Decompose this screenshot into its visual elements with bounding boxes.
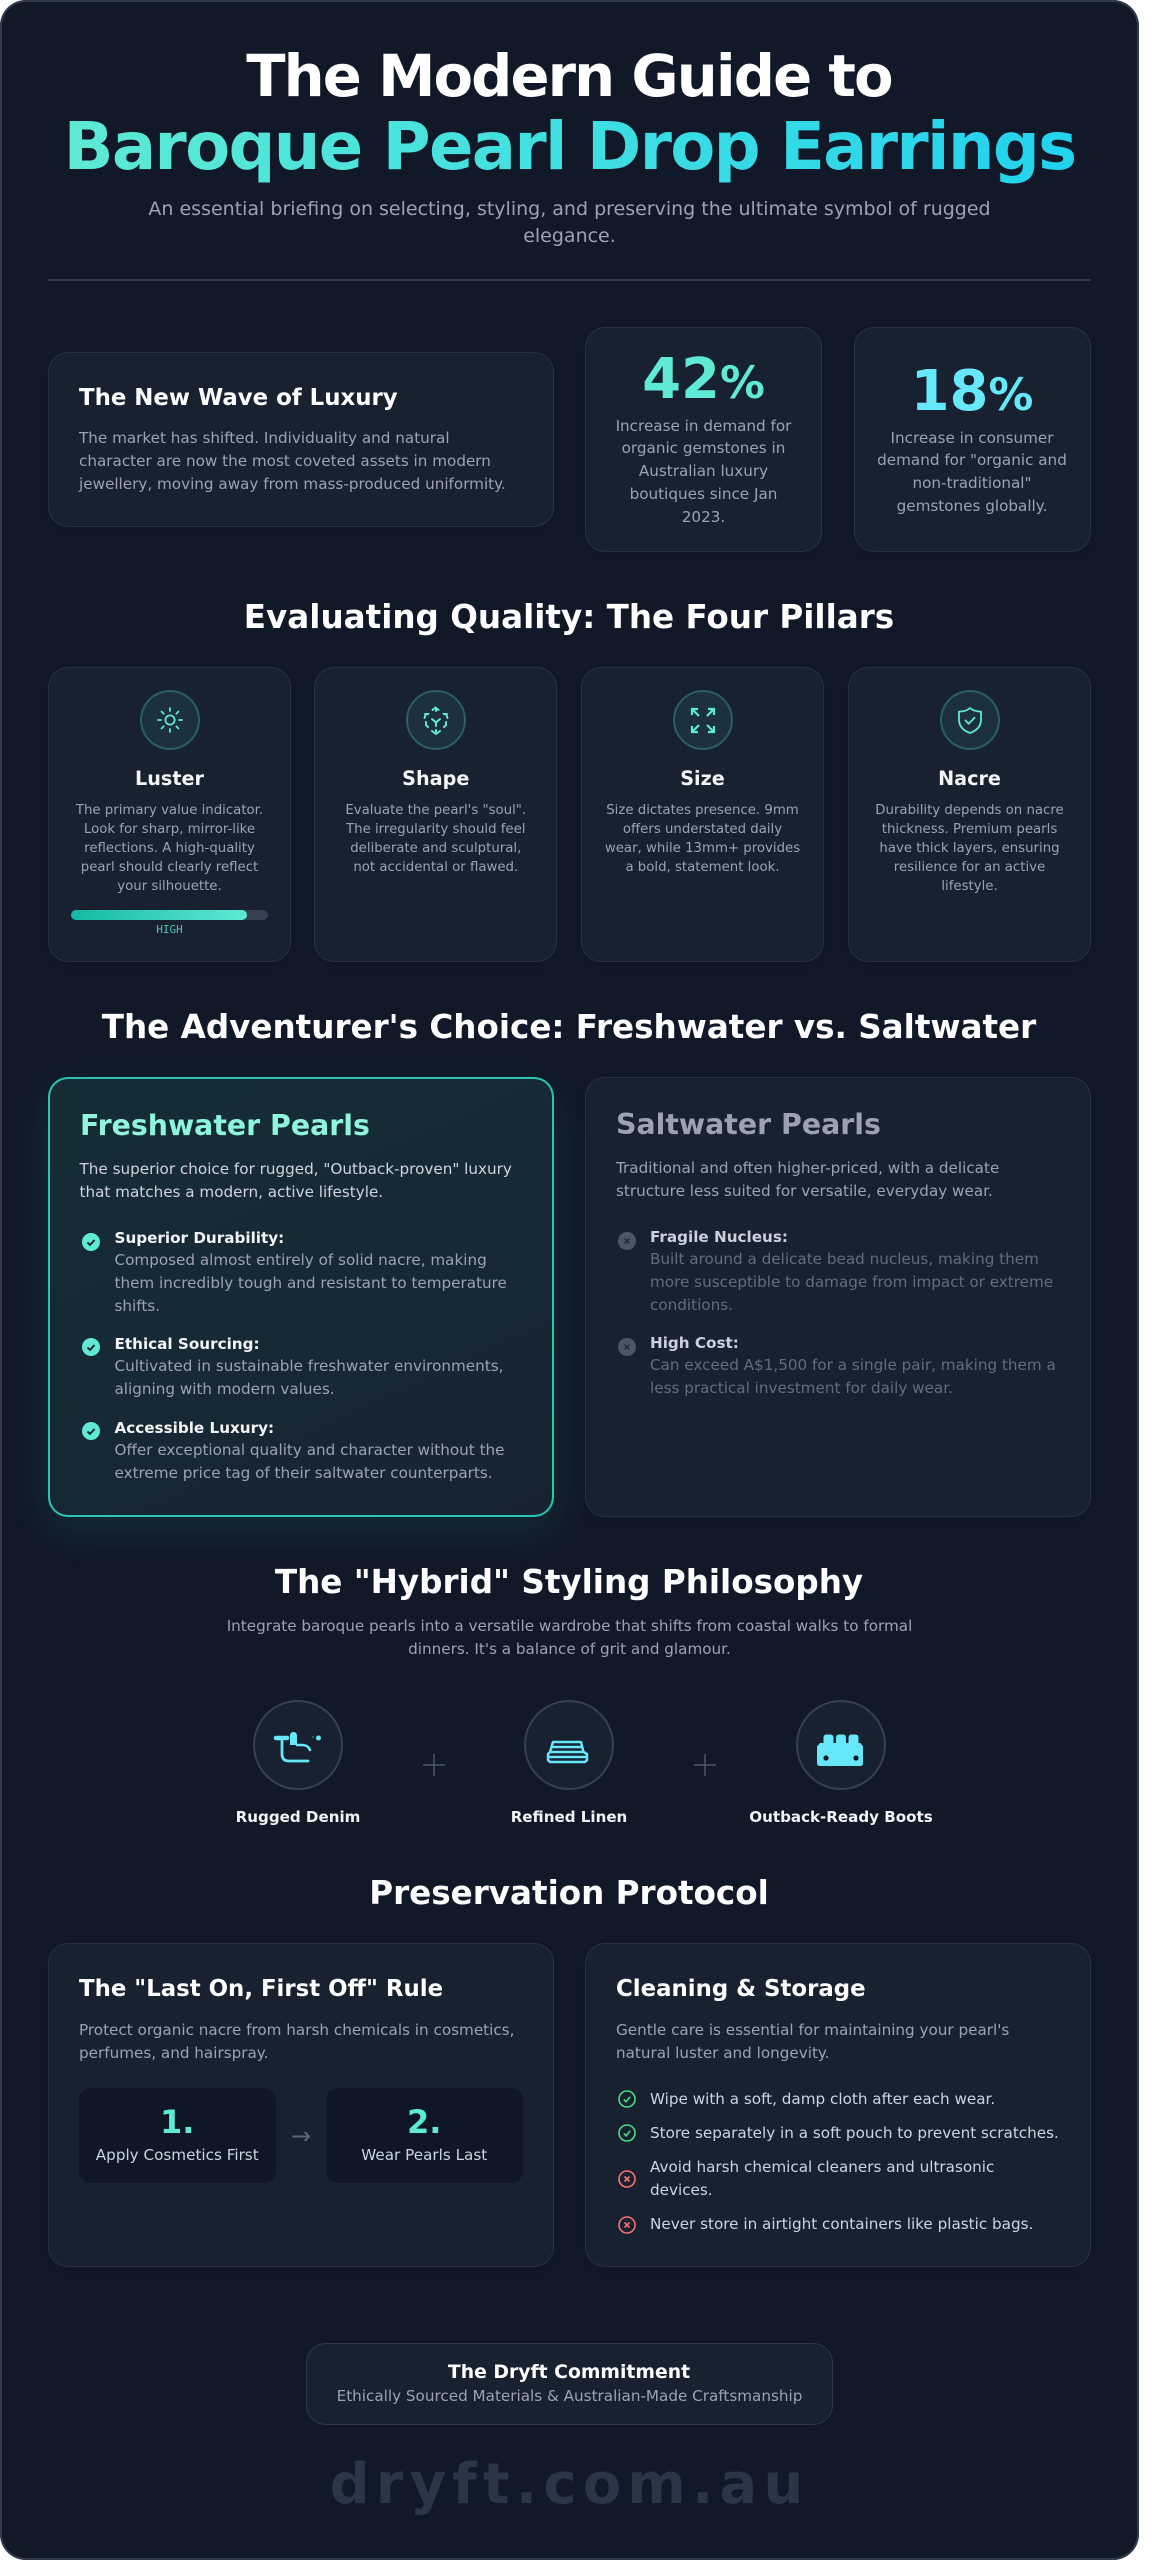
- text block: jewellery, moving away from mass-produced uniformity.: [79, 475, 506, 493]
- list item: [114, 1228, 507, 1315]
- panel heading: Cleaning & Storage: [616, 1976, 866, 2002]
- panel: nacre: [848, 667, 1091, 962]
- pillar text: not accidental or flawed.: [353, 860, 518, 875]
- list item: more susceptible to damage from impact or extreme: [650, 1273, 1053, 1291]
- step number: 1.: [160, 2103, 194, 2141]
- panel heading: Freshwater Pearls: [80, 1108, 370, 1142]
- subtitle: An essential briefing on selecting, styling, and preserving the ultimate symbol of rugged: [148, 198, 991, 220]
- icon: sun: [140, 690, 200, 750]
- panel: dryft commitment: [306, 2343, 832, 2425]
- commitment title: The Dryft Commitment: [448, 2362, 690, 2383]
- text block: [78, 429, 506, 493]
- panel: stat 42%: [585, 327, 822, 552]
- step label: Apply Cosmetics First: [96, 2146, 259, 2164]
- heading: The New Wave of Luxury: [79, 385, 398, 411]
- heading: four pillars: Evaluating Quality: The Four Pillars: [244, 598, 894, 636]
- icon: cross: [618, 1232, 636, 1250]
- label: outback-ready boots: Outback-Ready Boots: [749, 1808, 933, 1826]
- pillar title: Luster: [135, 767, 204, 790]
- icon: check: [82, 1422, 100, 1440]
- list item: Superior Durability:: [114, 1228, 284, 1246]
- heading: freshwater vs saltwater: The Adventurer's Choice: Freshwater vs. Saltwater: [102, 1008, 1036, 1046]
- care tip: Avoid harsh chemical cleaners and ultrasonic: [650, 2158, 994, 2176]
- pillar text: [76, 803, 263, 894]
- icon: shield check: [940, 690, 1000, 750]
- intro text: Traditional and often higher-priced, with a delicate: [616, 1159, 999, 1177]
- icon: check: [618, 2090, 636, 2108]
- stat description: non-traditional": [912, 474, 1032, 492]
- pillar text: deliberate and sculptural,: [350, 841, 521, 856]
- list item: Built around a delicate bead nucleus, making them: [650, 1250, 1039, 1268]
- pillar text: wear, while 13mm+ provides: [605, 841, 800, 856]
- brand wordmark: dryft.com.au: [330, 2452, 809, 2517]
- intro text: The superior choice for rugged, "Outback-proven" luxury: [80, 1160, 512, 1178]
- stat number: 18%: [911, 359, 1033, 424]
- subtitle: [148, 198, 991, 247]
- intro text: [616, 1159, 999, 1200]
- panel text: natural luster and longevity.: [616, 2044, 830, 2062]
- bar label: HIGH: [156, 923, 183, 936]
- list item: Can exceed A$1,500 for a single pair, making them a: [650, 1356, 1056, 1374]
- section intro: Integrate baroque pearls into a versatile wardrobe that shifts from coastal walks to formal: [227, 1617, 912, 1635]
- stat description: [877, 428, 1067, 515]
- panel heading: Saltwater Pearls: [616, 1108, 881, 1141]
- pillar text: Look for sharp, mirror-like: [84, 822, 255, 837]
- panel text: Gentle care is essential for maintaining your pearl's: [616, 2021, 1009, 2039]
- step 2: [326, 2088, 522, 2183]
- intro text: structure less suited for versatile, everyday wear.: [616, 1182, 993, 1200]
- list item: High Cost:: [650, 1334, 739, 1352]
- pillar text: a bold, statement look.: [625, 860, 780, 875]
- pillar text: [605, 803, 800, 875]
- commitment text: Ethically Sourced Materials & Australian-Made Craftsmanship: [337, 2387, 802, 2405]
- arrow: →: [291, 2122, 311, 2150]
- care tip: [650, 2158, 994, 2199]
- panel: shape: [314, 667, 557, 962]
- panel text: [616, 2021, 1009, 2062]
- pillar text: [875, 803, 1064, 894]
- stat description: 2023.: [682, 508, 725, 526]
- pillar text: The irregularity should feel: [346, 822, 525, 837]
- pillar title: Size: [680, 767, 725, 790]
- list item: Fragile Nucleus:: [650, 1228, 788, 1246]
- pillar text: The primary value indicator.: [76, 803, 263, 818]
- list item: aligning with modern values.: [114, 1380, 335, 1398]
- icon: check: [618, 2124, 636, 2142]
- list item: Offer exceptional quality and character without the: [114, 1441, 504, 1459]
- panel heading: The "Last On, First Off" Rule: [79, 1976, 443, 2002]
- intro text: [79, 1160, 512, 1201]
- list item: less practical investment for daily wear.: [650, 1379, 953, 1397]
- step label: Wear Pearls Last: [361, 2146, 487, 2164]
- icon: refined linen: [524, 1700, 614, 1790]
- pillar text: resilience for an active: [894, 860, 1045, 875]
- panel text: perfumes, and hairspray.: [79, 2044, 268, 2062]
- label: rugged denim: Rugged Denim: [236, 1808, 360, 1826]
- section intro: [227, 1617, 912, 1658]
- pillar title: Shape: [402, 767, 469, 790]
- care tip: Never store in airtight containers like plastic bags.: [650, 2215, 1033, 2233]
- stat number: 42%: [642, 347, 765, 412]
- pillar text: offers understated daily: [623, 822, 782, 837]
- label: refined linen: Refined Linen: [511, 1808, 627, 1826]
- title: The Modern Guide to: [246, 43, 892, 110]
- step number: 2.: [407, 2103, 441, 2141]
- list item: them incredibly tough and resistant to temperature: [114, 1274, 507, 1292]
- step 1: [79, 2088, 276, 2183]
- section intro: dinners. It's a balance of grit and glamour.: [408, 1640, 731, 1658]
- text block: The market has shifted. Individuality and natural: [79, 429, 450, 447]
- list item: shifts.: [114, 1297, 160, 1315]
- list item: Accessible Luxury:: [114, 1418, 274, 1436]
- icon: irregular arrows: [406, 690, 466, 750]
- subtitle: elegance.: [523, 225, 616, 247]
- list item: Ethical Sourcing:: [114, 1334, 260, 1352]
- panel: saltwater pearls: [585, 1077, 1091, 1517]
- list item: conditions.: [650, 1296, 733, 1314]
- pillar title: Nacre: [938, 767, 1001, 790]
- pillar text: thickness. Premium pearls: [882, 822, 1057, 837]
- stat description: organic gemstones in: [622, 439, 785, 457]
- pillar text: Durability depends on nacre: [875, 803, 1064, 818]
- pillar text: your silhouette.: [117, 879, 222, 894]
- icon: cross: [618, 2216, 636, 2234]
- progress bar: [71, 910, 268, 920]
- list item: Cultivated in sustainable freshwater environments,: [114, 1357, 503, 1375]
- list item: extreme price tag of their saltwater counterparts.: [114, 1464, 493, 1482]
- icon: check: [82, 1338, 100, 1356]
- pillar text: lifestyle.: [941, 879, 998, 894]
- care tip: Store separately in a soft pouch to prevent scratches.: [650, 2124, 1059, 2142]
- pillar text: reflections. A high-quality: [84, 841, 255, 856]
- pillar text: have thick layers, ensuring: [879, 841, 1060, 856]
- icon: rugged denim: [253, 1700, 343, 1790]
- plus: [694, 1754, 716, 1776]
- heading: hybrid styling: The "Hybrid" Styling Philosophy: [275, 1563, 863, 1601]
- care tip: Wipe with a soft, damp cloth after each wear.: [650, 2090, 995, 2108]
- panel text: Protect organic nacre from harsh chemicals in cosmetics,: [79, 2021, 514, 2039]
- list item: [650, 1334, 1056, 1397]
- stat description: demand for "organic and: [877, 451, 1067, 469]
- panel: stat 18%: [854, 327, 1091, 552]
- panel: new wave of luxury: [48, 352, 554, 527]
- title highlight: Baroque Pearl Drop Earrings: [64, 109, 1075, 185]
- text block: character are now the most coveted assets in modern: [79, 452, 491, 470]
- stat description: Increase in consumer: [891, 428, 1053, 446]
- plus: [423, 1754, 445, 1776]
- icon: cross: [618, 2170, 636, 2188]
- panel: last on first off: [48, 1943, 554, 2267]
- care tip: devices.: [650, 2181, 713, 2199]
- icon: check: [82, 1233, 100, 1251]
- pillar text: Evaluate the pearl's "soul".: [345, 803, 526, 818]
- stat description: Increase in demand for: [616, 416, 791, 434]
- stat description: gemstones globally.: [897, 497, 1047, 515]
- pillar text: [345, 803, 526, 875]
- panel text: [79, 2021, 514, 2062]
- pillar text: Size dictates presence. 9mm: [606, 803, 799, 818]
- stat description: [616, 416, 792, 526]
- list item: [650, 1228, 1053, 1314]
- heading: preservation protocol: Preservation Protocol: [369, 1874, 769, 1912]
- panel: luster: [48, 667, 291, 962]
- icon: outback boots: [796, 1700, 886, 1790]
- list item: [114, 1418, 504, 1482]
- icon: expand arrows: [673, 690, 733, 750]
- stat description: Australian luxury: [639, 462, 768, 480]
- list item: [114, 1334, 503, 1398]
- panel: cleaning and storage: [585, 1943, 1091, 2267]
- icon: cross: [618, 1338, 636, 1356]
- pillar text: pearl should clearly reflect: [81, 860, 258, 875]
- panel: size: [581, 667, 824, 962]
- list item: Composed almost entirely of solid nacre, making: [114, 1251, 487, 1269]
- panel: freshwater pearls: [48, 1077, 554, 1517]
- stat description: boutiques since Jan: [630, 485, 777, 503]
- intro text: that matches a modern, active lifestyle.: [80, 1183, 383, 1201]
